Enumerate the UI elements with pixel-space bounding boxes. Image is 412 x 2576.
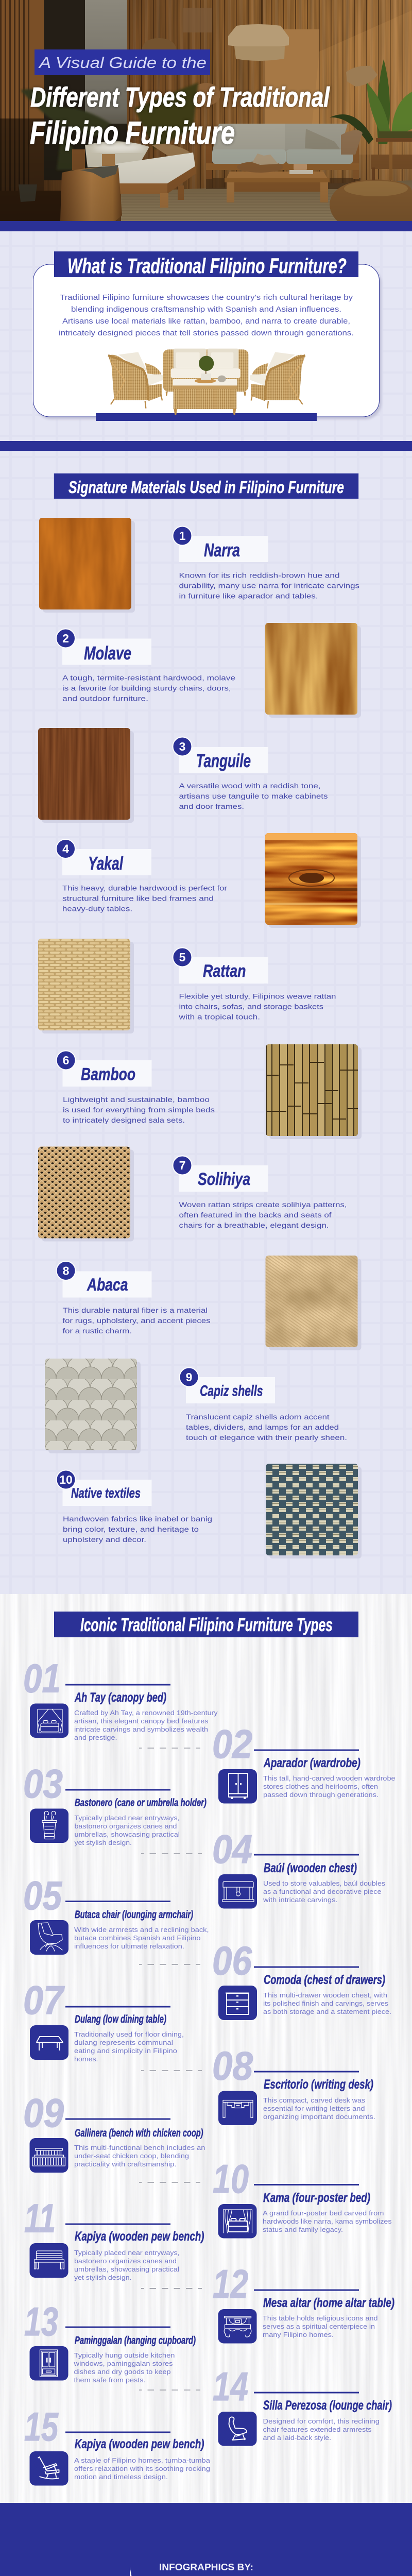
icon: rocking chair	[30, 2451, 68, 2485]
plants left	[21, 82, 198, 170]
yakal label: 4	[62, 842, 69, 855]
ah tay description: and prestige.	[74, 1734, 117, 1741]
slatted wall left	[0, 0, 44, 191]
dulang description: dulang represents communal	[74, 2039, 173, 2046]
item 09	[23, 2090, 205, 2182]
woven pouf	[330, 179, 412, 221]
dulang description	[74, 2031, 184, 2063]
icon: chest of drawers	[218, 1986, 257, 2020]
molave label: 2	[62, 632, 69, 645]
intro paragraph: intricately designed pieces that tell stories passed down through generations.	[59, 329, 354, 337]
tumba-tumba description: offers relaxation with its soothing rocking	[74, 2465, 210, 2472]
item 15	[24, 2404, 210, 2485]
capiz label: 9	[186, 1370, 192, 1384]
item 14	[213, 2364, 392, 2446]
item 03: Bastonero (cane or umbrella holder)	[75, 1797, 207, 1808]
icon: hanging cupboard	[30, 2346, 68, 2380]
item 01	[23, 1656, 218, 1748]
butaca description	[74, 1926, 209, 1950]
tanguile text: A versatile wood with a reddish tone,	[179, 782, 320, 790]
tanguile label: Tanguile	[196, 750, 251, 771]
item 06	[212, 1938, 391, 2020]
kapiya description: bastonero organizes canes and	[74, 2258, 177, 2265]
molave label	[56, 629, 151, 665]
textile text: Handwoven fabrics like inabel or banig	[63, 1515, 212, 1523]
solihiya swatch	[38, 1147, 134, 1242]
intro title tag: A Visual Guide to the	[38, 54, 207, 72]
abaca label: 8	[63, 1264, 70, 1278]
intro paragraph	[59, 293, 354, 337]
kapiya description: umbrellas, showcasing practical	[74, 2266, 179, 2273]
abaca text: for a rustic charm.	[63, 1327, 132, 1335]
item 04	[212, 1826, 385, 1908]
bamboo text	[63, 1096, 215, 1124]
icon: altar table	[218, 2309, 256, 2343]
item 01: 01	[23, 1656, 61, 1701]
rattan label: 5	[179, 951, 186, 964]
textile text: upholstery and décor.	[63, 1536, 146, 1544]
material 5: rattan	[38, 939, 336, 1033]
rattan text: into chairs, sofas, and storage baskets	[179, 1003, 323, 1011]
comoda description: This multi-drawer wooden chest, with	[263, 1992, 387, 1999]
item 02: 02	[212, 1721, 252, 1767]
item 07: Dulang (low dining table)	[75, 2013, 166, 2025]
butaca description: butaca combines Spanish and Filipino	[74, 1935, 201, 1942]
molave text	[62, 674, 235, 703]
item 10	[213, 2156, 391, 2238]
icon: butaca armchair	[30, 1920, 68, 1955]
item 05	[23, 1873, 209, 1964]
item 04: 04	[212, 1826, 252, 1872]
tumba-tumba description: A staple of Filipino homes, tumba-tumba	[74, 2457, 210, 2464]
dulang description: homes.	[74, 2056, 98, 2063]
intro paragraph: blending indigenous craftsmanship with Spanish and Asian influences.	[71, 305, 341, 314]
floor left	[0, 191, 61, 221]
section background: furniture types	[0, 1594, 412, 2503]
molave text: A tough, termite-resistant hardwood, molave	[62, 674, 235, 682]
rug	[121, 180, 412, 221]
yakal label: Yakal	[88, 853, 124, 874]
abaca text: for rugs, upholstery, and accent pieces	[63, 1317, 211, 1325]
tanguile label	[173, 737, 268, 773]
narra text	[179, 572, 359, 600]
item 14: 14	[213, 2364, 248, 2409]
textile text	[63, 1515, 212, 1544]
material 2: molave	[56, 623, 361, 718]
kama description	[263, 2210, 391, 2233]
silla perezosa description: Designed for comfort, this reclining	[263, 2418, 380, 2425]
abaca label	[57, 1261, 151, 1297]
item 02	[212, 1721, 396, 1803]
ah tay description: artisan, this elegant canopy bed features	[74, 1718, 208, 1725]
heading: iconic furniture types	[54, 1612, 358, 1637]
aparador description: stores clothes and heirlooms, often	[263, 1783, 378, 1790]
bastonero description: yet stylish design.	[74, 1839, 132, 1846]
solihiya label: 7	[179, 1159, 185, 1172]
textile label: 10	[59, 1473, 73, 1486]
kama description: A grand four-poster bed carved from	[263, 2210, 384, 2217]
credit label: INFOGRAPHICS BY:	[159, 2562, 253, 2572]
escritorio description: essential for writing letters and	[263, 2105, 365, 2112]
rattan swatch	[38, 939, 134, 1033]
blue divider	[0, 441, 412, 451]
textile text: bring color, texture, and heritage to	[63, 1526, 199, 1533]
icon: low dining table	[30, 2025, 68, 2060]
material 3: tanguile	[38, 728, 328, 823]
capiz label: Capiz shells	[200, 1383, 263, 1399]
item 15: 15	[24, 2404, 59, 2449]
baul description: as a functional and decorative piece	[263, 1888, 382, 1895]
narra label: 1	[179, 529, 186, 543]
baul description: with intricate carvings.	[263, 1896, 338, 1904]
panel bottom bar	[96, 413, 317, 421]
item 06: 06	[212, 1938, 252, 1984]
icon: wardrobe	[218, 1769, 257, 1803]
material 6: bamboo	[57, 1044, 362, 1139]
material 10: native textiles	[57, 1464, 362, 1558]
main title: Different Types of Traditional	[30, 82, 330, 113]
abaca label: Abaca	[87, 1275, 128, 1295]
tumba-tumba description	[74, 2457, 210, 2481]
rattan text: with a tropical touch.	[178, 1013, 260, 1021]
photo: rattan furniture set	[108, 349, 305, 415]
hero photo: living room with wooden furniture	[0, 0, 412, 221]
tanguile text: artisans use tanguile to make cabinets	[179, 792, 328, 800]
material 9: capiz shells	[45, 1359, 347, 1453]
kama description: status and family legacy.	[263, 2226, 343, 2233]
molave label: Molave	[84, 642, 131, 664]
item 12	[213, 2261, 394, 2343]
wall lamp right	[346, 66, 377, 87]
item 13	[24, 2299, 200, 2390]
abaca text	[63, 1307, 211, 1335]
textile label	[57, 1470, 151, 1506]
item 15: Kapiya (wooden pew bench)	[75, 2437, 204, 2451]
hero bottom bar	[0, 221, 412, 231]
lower gradient	[0, 141, 412, 221]
gallinera description	[74, 2144, 205, 2168]
item 10: Kama (four-poster bed)	[263, 2191, 370, 2205]
aparador description: passed down through generations.	[263, 1791, 379, 1799]
icon: four-poster bed	[218, 2204, 256, 2238]
wall decoration	[183, 8, 212, 32]
molave text: is a favorite for building sturdy chairs, doors,	[62, 684, 231, 692]
silla perezosa description	[263, 2418, 380, 2442]
item 07: 07	[23, 1977, 65, 2023]
bastonero description: umbrellas, showcasing practical	[74, 1831, 180, 1838]
mesa altar description: This table holds religious icons and	[263, 2315, 378, 2322]
material 4: yakal	[56, 833, 361, 928]
icon: canopy bed	[30, 1703, 68, 1738]
solihiya label: Solihiya	[198, 1170, 250, 1189]
item 07	[23, 1977, 202, 2071]
paminggalan description: dishes and dry goods to keep	[74, 2368, 171, 2376]
capiz label	[179, 1367, 275, 1403]
kapiya description: yet stylish design.	[74, 2274, 132, 2281]
solihiya label	[173, 1156, 268, 1192]
section background: materials	[0, 231, 412, 1594]
comoda description: its polished finish and carvings, serves	[263, 2000, 388, 2007]
gallinera description: under-seat chicken coop, blending	[74, 2153, 189, 2160]
material 7: solihiya	[38, 1147, 347, 1242]
escritorio description: This compact, carved desk was	[263, 2097, 365, 2104]
material 1: narra	[39, 518, 359, 613]
main title	[30, 82, 330, 151]
butaca description: With wide armrests and a reclining back,	[74, 1926, 209, 1934]
side chair	[371, 138, 412, 180]
capiz text	[186, 1413, 347, 1442]
narra text: durability, many use narra for intricate carvings	[179, 582, 359, 589]
comoda description: as both storage and a statement piece.	[263, 2008, 391, 2015]
capiz text: touch of elegance with their pearly sheen.	[186, 1434, 347, 1442]
yakal text	[62, 884, 228, 913]
rattan label: Rattan	[203, 961, 246, 981]
kapiya description	[74, 2249, 179, 2281]
panel: what is traditional filipino furniture	[33, 251, 382, 421]
icon: chicken coop bench	[30, 2138, 68, 2173]
hanging lamp	[228, 0, 289, 61]
bamboo swatch	[266, 1044, 362, 1139]
bamboo label: 6	[63, 1054, 69, 1067]
narra label	[173, 527, 268, 562]
ah tay description	[74, 1709, 218, 1741]
baul description	[263, 1880, 385, 1904]
escritorio description: organizing important documents.	[263, 2113, 375, 2121]
plants right	[330, 59, 412, 144]
round lamp	[197, 83, 220, 106]
main title: Filipino Furniture	[30, 115, 235, 151]
solihiya text: often featured in the backs and seats of	[179, 1211, 332, 1219]
item 09: 09	[23, 2090, 64, 2136]
bamboo text: Lightweight and sustainable, bamboo	[63, 1096, 210, 1104]
narra text: Known for its rich reddish-brown hue and	[179, 572, 340, 579]
item 11: 11	[24, 2196, 56, 2241]
baul description: Used to store valuables, baúl doubles	[263, 1880, 385, 1887]
paminggalan description: windows, paminggalan stores	[73, 2360, 173, 2367]
dark doorway and plaster column	[44, 0, 127, 180]
item 02: Aparador (wardrobe)	[263, 1756, 360, 1770]
paminggalan description: them safe from pests.	[74, 2377, 145, 2384]
molave swatch	[265, 623, 361, 718]
yakal text: heavy-duty tables.	[62, 905, 132, 913]
title glow	[93, 145, 144, 151]
item 03	[23, 1761, 207, 1854]
silla perezosa description: chair features extended armrests	[263, 2426, 372, 2433]
bamboo label: Bamboo	[81, 1064, 135, 1084]
comoda description	[263, 1992, 391, 2015]
abaca swatch	[266, 1256, 362, 1350]
narra text: in furniture like aparador and tables.	[179, 592, 318, 600]
paminggalan description: Typically hung outside kitchen	[74, 2352, 175, 2359]
item 01: Ah Tay (canopy bed)	[74, 1690, 166, 1705]
escritorio description	[263, 2097, 375, 2121]
aparador description: This tall, hand-carved wooden wardrobe	[263, 1775, 396, 1782]
heading: signature materials	[54, 473, 358, 499]
gallinera description: This multi-functional bench includes an	[74, 2144, 205, 2151]
bamboo text: to intricately designed sala sets.	[63, 1116, 185, 1124]
item 08: Escritorio (writing desk)	[264, 2077, 373, 2092]
yakal swatch	[265, 833, 361, 928]
dulang description: eating and simplicity in Filipino	[74, 2047, 177, 2055]
coffee table	[225, 172, 330, 202]
solihiya text: Woven rattan strips create solihiya patterns,	[179, 1201, 347, 1209]
item 11: Kapiya (wooden pew bench)	[75, 2229, 204, 2244]
intro paragraph: Traditional Filipino furniture showcases the country's rich cultural heritage by	[60, 293, 353, 302]
tray with coral and books	[237, 154, 313, 174]
solihiya text	[179, 1201, 347, 1229]
ah tay description: Crafted by Ah Tay, a renowned 19th-century	[74, 1709, 218, 1717]
item 11	[24, 2196, 204, 2289]
logo: federal land	[120, 2567, 293, 2576]
vase	[19, 184, 37, 202]
sun shade on wall	[319, 10, 412, 155]
rattan label	[173, 948, 268, 984]
item 03: 03	[23, 1761, 63, 1806]
item 05: 05	[23, 1873, 62, 1918]
capiz swatch	[45, 1359, 141, 1453]
bastonero description: bastonero organizes canes and	[74, 1823, 177, 1830]
mesa altar description: serves as a spiritual centerpiece in	[263, 2323, 375, 2330]
narra label: Narra	[204, 539, 240, 561]
icon: lounge chair	[218, 2412, 256, 2446]
wooden stump	[60, 154, 122, 221]
textile swatch	[266, 1464, 362, 1558]
ah tay description: intricate carvings and symbolizes wealth	[74, 1726, 208, 1733]
icon: wooden chest	[218, 1874, 257, 1908]
dark gradient	[0, 118, 44, 191]
material 8: abaca	[57, 1256, 362, 1350]
tanguile text	[179, 782, 328, 810]
item 09: Gallinera (bench with chicken coop)	[75, 2127, 203, 2139]
small lamp behind	[142, 38, 177, 49]
kama description: hardwoods like narra, kama symbolizes	[263, 2218, 391, 2225]
aparador description	[263, 1775, 396, 1799]
tanguile text: and door frames.	[179, 803, 244, 810]
tumba-tumba description: motion and timeless design.	[74, 2473, 168, 2481]
mesa altar description: many Filipino homes.	[263, 2331, 334, 2338]
bamboo label	[57, 1051, 151, 1087]
tanguile label: 3	[179, 740, 185, 753]
textile label: Native textiles	[71, 1485, 141, 1501]
icon: writing desk	[218, 2091, 257, 2125]
paminggalan description	[73, 2352, 175, 2384]
yakal text: structural furniture like bed frames and	[62, 894, 214, 903]
bamboo text: is used for everything from simple beds	[63, 1106, 215, 1114]
intro paragraph: Artisans use local materials like rattan, bamboo, and narra to create durable,	[62, 317, 350, 326]
molave text: and outdoor furniture.	[62, 694, 148, 703]
icon: cane holder	[30, 1808, 68, 1843]
white daybed	[72, 141, 196, 208]
footer	[0, 2503, 412, 2576]
tanguile swatch	[38, 728, 134, 823]
narra swatch	[39, 518, 135, 613]
intro title tag	[35, 49, 210, 75]
butaca description: influences for ultimate relaxation.	[74, 1943, 184, 1950]
yakal text: This heavy, durable hardwood is perfect for	[62, 884, 228, 892]
gallinera description: practicality with craftsmanship.	[74, 2161, 176, 2168]
capiz text: tables, dividers, and lamps for an added	[186, 1423, 339, 1431]
abaca text: This durable natural fiber is a material	[63, 1307, 208, 1314]
item 13: Paminggalan (hanging cupboard)	[75, 2335, 196, 2346]
item 05: Butaca chair (lounging armchair)	[75, 1909, 193, 1921]
kapiya description: Typically placed near entryways,	[74, 2249, 179, 2257]
bastonero description	[74, 1815, 180, 1846]
item 12: 12	[213, 2261, 248, 2307]
wall panel frame	[265, 29, 319, 134]
rattan text: Flexible yet sturdy, Filipinos weave rattan	[179, 992, 336, 1001]
item 10: 10	[213, 2156, 249, 2201]
rattan text	[178, 992, 336, 1021]
icon: pew bench	[30, 2243, 68, 2278]
bastonero description: Typically placed near entryways,	[74, 1815, 179, 1822]
grey sofa	[206, 124, 363, 179]
mesa altar description	[263, 2315, 378, 2338]
item 13: 13	[24, 2299, 58, 2344]
yakal label	[56, 839, 151, 875]
capiz text: Translucent capiz shells adorn accent	[186, 1413, 330, 1421]
item 04: Baúl (wooden chest)	[264, 1861, 357, 1875]
shadow under sofa	[206, 178, 360, 189]
solihiya text: chairs for a breathable, elegant design.	[179, 1222, 329, 1229]
item 08	[212, 2043, 375, 2125]
silla perezosa description: and a laid-back style.	[263, 2434, 331, 2442]
item 08: 08	[212, 2043, 253, 2089]
dulang description: Traditionally used for floor dining,	[74, 2031, 184, 2038]
